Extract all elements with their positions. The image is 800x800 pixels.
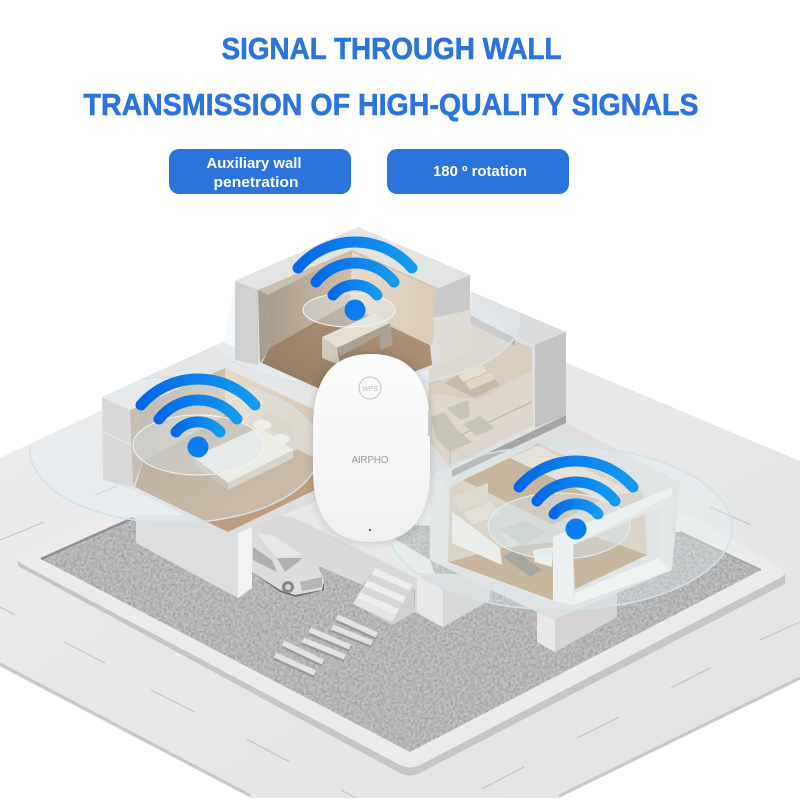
feature button: auxiliary wall penetration: penetration <box>214 175 298 191</box>
lounge chairs <box>431 400 495 452</box>
wifi icon: right room <box>519 461 633 540</box>
signal disc: top inner <box>303 293 395 327</box>
wifi icon: left room <box>141 379 255 458</box>
illustration: isometric house on base <box>0 227 800 798</box>
base slab <box>0 350 800 798</box>
WPS button <box>359 377 381 399</box>
lower right room <box>430 423 680 620</box>
raised rim and gravel yard <box>17 495 785 776</box>
upper room <box>235 227 473 398</box>
WPS button: WPS <box>362 386 378 393</box>
left room wall block <box>102 397 143 487</box>
feature button: 180 degree rotation <box>387 149 569 194</box>
coffee table <box>500 520 547 545</box>
signal disc: left inner <box>133 415 263 475</box>
dark rug <box>503 550 542 577</box>
feature button: auxiliary wall penetration <box>169 149 351 194</box>
middle room with terrace <box>425 292 566 477</box>
lower room front frame <box>553 487 672 605</box>
bed <box>193 420 296 490</box>
exterior stairs <box>353 568 415 625</box>
wood floor <box>135 415 315 532</box>
terrace floor <box>430 370 533 467</box>
product: white extender device <box>313 354 431 542</box>
beam under roof <box>470 316 515 346</box>
title: signal through wall: SIGNAL THROUGH WALL <box>222 31 562 66</box>
car port wall and pillars <box>136 500 617 652</box>
indicator light <box>369 529 371 531</box>
car <box>252 532 324 597</box>
wifi icon: top room <box>298 242 412 320</box>
signal disc: right outer <box>388 446 732 610</box>
wood floor <box>448 537 647 600</box>
stepping stones <box>275 617 377 675</box>
wood ceiling band <box>463 458 600 525</box>
desk <box>322 313 393 365</box>
feature button: 180 degree rotation: 180 º rotation <box>433 164 527 180</box>
indoor stairs <box>445 365 500 398</box>
signal disc: top outer <box>212 279 520 386</box>
left room <box>102 342 320 537</box>
feature button: auxiliary wall penetration: Auxiliary wall <box>206 156 302 172</box>
floor <box>262 305 432 388</box>
signal disc: left outer <box>30 377 320 523</box>
brand name: AIRPHO <box>352 455 389 466</box>
heading: transmission of high-quality signals: TRANSMISSION OF HIGH-QUALITY SIGNALS <box>84 87 698 122</box>
signal disc: right inner <box>488 493 630 559</box>
sofa <box>452 483 553 567</box>
